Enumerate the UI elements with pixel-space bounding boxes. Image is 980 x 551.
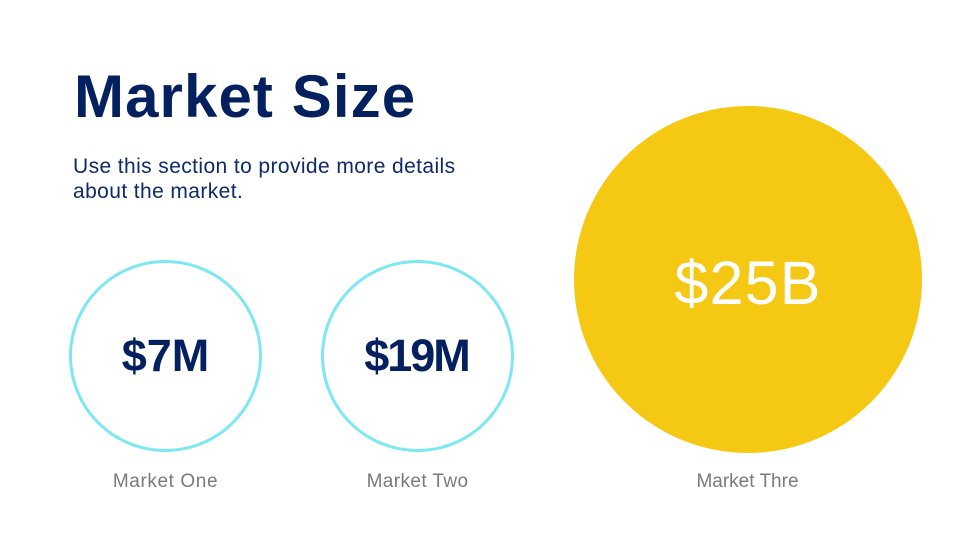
label: market three: Market Thre <box>696 471 799 492</box>
value: market two: $19M <box>364 330 469 381</box>
value: market three: $25B <box>674 249 822 317</box>
circle: market two <box>321 260 514 452</box>
label: market two: Market Two <box>367 471 468 492</box>
value: market one: $7M <box>122 330 209 381</box>
circle: market three <box>574 106 922 453</box>
label: market one: Market One <box>113 471 218 492</box>
description text: Use this section to provide more details <box>73 155 456 178</box>
circle: market one <box>69 260 262 452</box>
description text: about the market. <box>73 180 243 202</box>
description text <box>73 155 456 202</box>
title: Market Size <box>74 63 416 130</box>
